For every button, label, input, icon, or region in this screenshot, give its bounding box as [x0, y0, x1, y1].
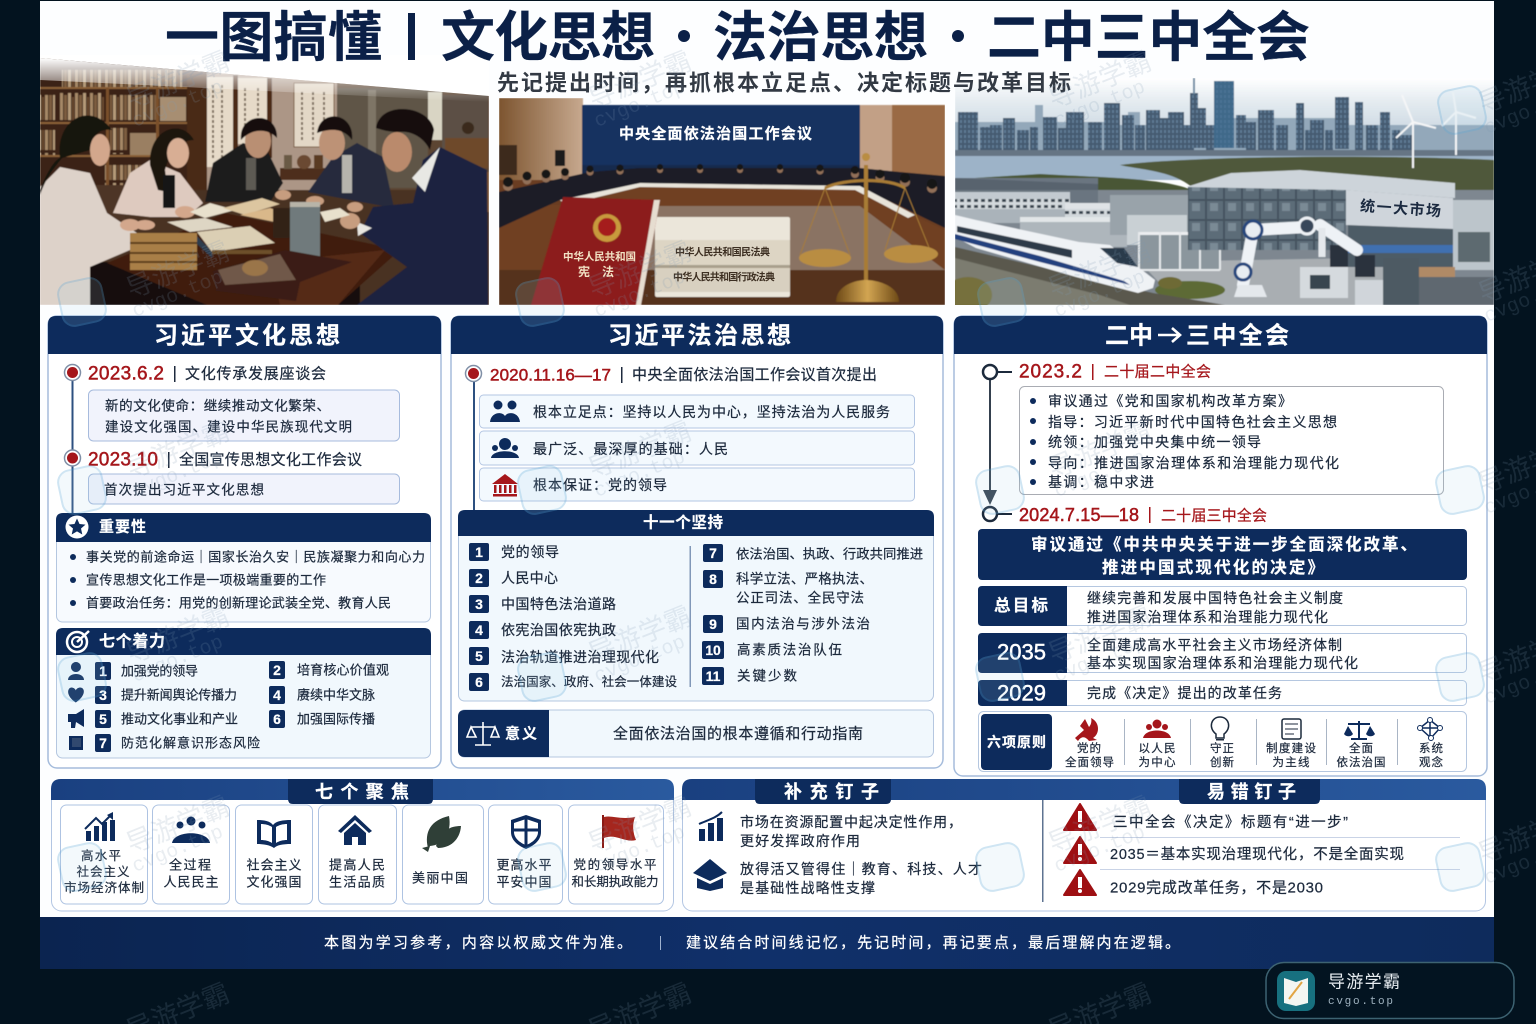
meeting backdrop title: 中央全面依法治国工作会议 — [619, 124, 812, 142]
brand badge: cvgo.top — [1328, 996, 1393, 1008]
title: 文化思想 — [441, 8, 655, 68]
watermark layer: cvgo.top — [591, 446, 689, 504]
left building — [955, 177, 1099, 203]
focus card 6: 平安中国 — [496, 874, 552, 890]
timeline node 2024.7.15-18: 二十届三中全会 — [1161, 506, 1267, 524]
box: first proposed — [88, 474, 400, 504]
row: overall goal: 总目标 — [994, 596, 1048, 615]
watermark layer: 导游学霸 — [584, 236, 696, 304]
seven efforts list: 1 — [99, 663, 107, 679]
focus card 7 — [568, 805, 664, 904]
panel heading: culture: 习近平文化思想 — [154, 322, 340, 350]
timeline node 2020.11.16-17: 2020.11.16—17 — [490, 366, 611, 384]
right list items 7-11: 国内法治与涉外法治 — [736, 616, 870, 632]
row: 2029: 完成《决定》提出的改革任务 — [1087, 685, 1282, 701]
watermark layer: cvgo.top — [129, 446, 227, 504]
panel heading: plenary sessions — [954, 316, 1487, 354]
icon: people meeting — [172, 816, 210, 843]
principle: systems thinking: 观念 — [1419, 755, 1444, 769]
watermark layer: cvgo.top — [591, 266, 689, 324]
warning 2: 2035＝基本实现治理现代化，不是全面实现 — [1110, 845, 1404, 863]
focus card 5: 美丽中国 — [412, 870, 468, 886]
icon: crowd — [491, 438, 519, 458]
sub-panel: 十一个坚持 — [458, 510, 934, 701]
left list items 1-6: 法治轨道推进治理现代化 — [501, 649, 659, 665]
heading tab: 七个聚焦 — [315, 781, 409, 802]
principle: institution building: 制度建设 — [1266, 741, 1316, 755]
bookshelf wall — [40, 60, 206, 186]
right list items 7-11: 11 — [706, 668, 721, 684]
arrow: second to third plenary — [983, 379, 997, 505]
note: education, science, talent: 放得活又管得住｜教育、科技、人才 — [740, 861, 982, 877]
icon: house — [338, 815, 372, 845]
row: 2029 — [978, 680, 1466, 706]
row: overall goal — [978, 586, 1466, 626]
right list items 7-11: 依法治国、执政、行政共同推进 — [736, 546, 923, 562]
left list items 1-6: 3 — [475, 596, 483, 612]
sub-panel: 重要性: 宣传思想文化工作是一项极端重要的工作 — [86, 572, 326, 588]
timeline node 2023.10: 2023.10 — [88, 450, 158, 470]
constitution book text: 中华人民共和国 — [563, 250, 636, 263]
bushes — [1155, 281, 1225, 299]
principle: party leadership: 全面领导 — [1065, 755, 1114, 769]
row: six principles — [978, 712, 1466, 772]
focus card 3: 社会主义 — [246, 858, 302, 872]
sub-panel: 七个着力: 七个着力 — [99, 632, 165, 650]
focus card 3: 文化强国 — [246, 874, 302, 890]
mid buildings — [1064, 208, 1110, 218]
man right — [357, 147, 488, 305]
watermark layer: cvgo.top — [129, 76, 227, 134]
principle: people-centred — [1138, 720, 1176, 769]
watermark layer: cvgo.top — [129, 631, 227, 689]
watermark layer: 导游学霸 — [122, 791, 234, 859]
title — [165, 8, 1310, 68]
seven efforts list: 赓续中华文脉 — [297, 688, 375, 702]
watermark layer: cvgo.top — [591, 76, 689, 134]
law code book text — [673, 246, 775, 284]
watermark layer: cvgo.top — [1051, 446, 1149, 504]
focus card 1: 高水平 — [81, 848, 121, 863]
warning 3: 2029完成改革任务，不是2030 — [1110, 880, 1323, 896]
bar: significance: 意义 — [505, 724, 537, 742]
footer band: 建议结合时间线记忆，先记时间，再记要点，最后理解内在逻辑。 — [686, 934, 1180, 952]
row: overall goal: 继续完善和发展中国特色社会主义制度 — [1087, 590, 1343, 606]
turbines — [1396, 95, 1436, 168]
row: 2035: 2035 — [997, 640, 1046, 664]
box: broadest foundation: 最广泛、最深厚的基础：人民 — [533, 441, 728, 457]
timeline node 2023.2: 二十届二中全会 — [1104, 362, 1211, 380]
row: 2029: 2029 — [997, 680, 1046, 706]
banner: decision title: 推进中国式现代化的决定》 — [1102, 557, 1324, 577]
timeline node 2023.10 — [64, 450, 362, 470]
constitution book text: 宪 法 — [578, 264, 614, 279]
timeline node 2020.11.16-17 — [466, 366, 877, 384]
focus card 4: 提高人民 — [329, 858, 385, 872]
heading tab: supplementary: 补充钉子 — [784, 781, 879, 802]
sub-panel: 重要性: 重要性 — [99, 518, 146, 536]
seven efforts list — [95, 661, 389, 752]
seven efforts list: 培育核心价值观 — [297, 662, 389, 678]
note: market role — [740, 814, 962, 849]
box: new cultural mission — [88, 390, 400, 441]
subtitle: 先记提出时间，再抓根本立足点、决定标题与改革目标 — [497, 70, 1071, 96]
photo: study group at table with books — [40, 50, 489, 305]
panel heading: rule of law — [451, 316, 943, 354]
row: 2035: 全面建成高水平社会主义市场经济体制 — [1087, 637, 1342, 653]
left list items 1-6: 6 — [475, 674, 483, 690]
panel: 七个聚焦 — [51, 779, 674, 911]
seven efforts list: 5 — [99, 711, 107, 727]
left list items 1-6: 人民中心 — [501, 570, 558, 586]
ground — [955, 190, 1494, 305]
far skyline — [955, 105, 1494, 152]
photo top fade — [40, 55, 489, 96]
focus card 1 — [60, 805, 148, 904]
principle: innovation: 创新 — [1210, 755, 1234, 769]
seven efforts list: 防范化解意识形态风险 — [121, 736, 260, 750]
bar: significance — [458, 710, 934, 757]
focus card 7: 和长期执政能力 — [572, 875, 658, 889]
left list items 1-6: 党的领导 — [501, 544, 559, 560]
market building sign: 统一大市场 — [1360, 197, 1442, 220]
brand badge: 导游学霸 — [1328, 972, 1400, 992]
right list items 7-11: 8 — [709, 571, 717, 587]
watermark layer: 导游学霸 — [584, 791, 696, 859]
watermark layer: cvgo.top — [591, 821, 689, 879]
box: broadest foundation — [480, 431, 914, 465]
watermark layer: 导游学霸 — [1044, 791, 1156, 859]
icon: graduation cap — [693, 859, 727, 891]
watermark layer: 导游学霸 — [122, 236, 234, 304]
principle: people-centred: 以人民 — [1138, 742, 1176, 755]
principle: innovation: 守正 — [1210, 741, 1234, 755]
principle: innovation — [1210, 717, 1234, 769]
focus card 4: 生活品质 — [329, 874, 385, 890]
box: second plenary points — [1020, 386, 1444, 494]
principle: party leadership: 党的 — [1077, 741, 1101, 755]
principle: systems thinking — [1418, 718, 1444, 769]
focus card 3 — [236, 805, 312, 904]
watermark layer: 导游学霸 — [584, 601, 696, 669]
box: second plenary points: 基调：稳中求进 — [1048, 474, 1154, 490]
seven efforts list: 加强党的领导 — [121, 664, 198, 678]
right list items 7-11: 10 — [705, 642, 721, 658]
focus card 7: 党的领导水平 — [574, 857, 656, 872]
title: 一图搞懂 — [165, 8, 382, 68]
watermark layer: 导游学霸 — [122, 46, 234, 114]
panel: 二中→三中全会 — [954, 316, 1487, 776]
icon: star — [66, 516, 88, 538]
right list items 7-11: 科学立法、严格执法、 — [736, 572, 873, 586]
left list items 1-6: 法治国家、政府、社会一体建设 — [501, 674, 677, 689]
sub-panel: 重要性: 事关党的前途命运｜国家长治久安｜民族凝聚力和向心力 — [86, 550, 425, 564]
footer band: 本图为学习参考，内容以权威文件为准。 — [324, 934, 632, 952]
law code book text: 中华人民共和国民法典 — [675, 246, 770, 258]
constitution book text — [563, 250, 636, 279]
man centre-right — [308, 143, 394, 208]
left list items 1-6: 中国特色法治道路 — [501, 596, 616, 612]
right list items 7-11: 9 — [709, 616, 717, 632]
man centre-left — [205, 143, 283, 202]
icon: scales — [467, 722, 499, 745]
timeline node 2023.6.2 — [64, 364, 326, 384]
box: second plenary points: 审议通过《党和国家机构改革方案》 — [1048, 393, 1292, 409]
principle: institution building: 为主线 — [1272, 755, 1310, 769]
sub-panel: 重要性 — [56, 513, 431, 622]
principle: systems thinking: 系统 — [1419, 742, 1444, 755]
machinery — [1300, 267, 1348, 298]
box: second plenary points: 统领：加强党中央集中统一领导 — [1048, 434, 1261, 450]
seven efforts list: 7 — [99, 735, 107, 751]
focus card 4 — [318, 805, 396, 904]
icon: book — [69, 736, 83, 750]
sub-panel: 重要性: 首要政治任务：用党的创新理论武装全党、教育人民 — [86, 596, 391, 610]
watermark layer: cvgo.top — [1051, 76, 1149, 134]
timeline node 2023.10: 全国宣传思想文化工作会议 — [179, 450, 362, 468]
icon: heart — [68, 688, 84, 702]
icon: shield — [511, 815, 541, 849]
icon: people group — [490, 400, 520, 422]
panel heading: plenary sessions: 三中全会 — [1186, 322, 1289, 350]
seven efforts list: 4 — [273, 687, 281, 703]
watermark layer: 导游学霸 — [584, 416, 696, 484]
watermark layer: cvgo.top — [129, 821, 227, 879]
sub-panel: 七个着力 — [56, 628, 431, 758]
timeline node 2020.11.16-17: 中央全面依法治国工作会议首次提出 — [632, 366, 877, 384]
brand badge — [1266, 962, 1514, 1018]
principle: rule of law: 依法治国 — [1336, 755, 1386, 769]
panel heading: culture — [48, 316, 441, 354]
box: second plenary points: 导向：推进国家治理体系和治理能力现代化 — [1048, 455, 1339, 471]
watermark layer: 导游学霸 — [1044, 416, 1156, 484]
timeline node 2023.2 — [983, 362, 1211, 382]
left list items 1-6: 1 — [475, 544, 483, 560]
table — [90, 262, 360, 305]
seven efforts list: 2 — [273, 662, 281, 678]
panel heading: plenary sessions: 二中 — [1105, 322, 1153, 350]
warning 1: 三中全会《决定》标题有“进一步” — [1113, 813, 1348, 831]
seven efforts list: 推动文化事业和产业 — [121, 712, 238, 726]
focus card 6: 更高水平 — [496, 858, 552, 872]
banner: decision title — [978, 529, 1467, 580]
timeline line — [473, 375, 475, 511]
books — [190, 203, 235, 218]
seven efforts list: 3 — [99, 687, 107, 703]
box: fundamental guarantee: 根本保证：党的领导 — [533, 477, 667, 493]
bar: significance: 全面依法治国的根本遵循和行动指南 — [613, 724, 863, 742]
watermark layer: cvgo.top — [591, 631, 689, 689]
watermark layer: cvgo.top — [1051, 266, 1149, 324]
watermark layer: cvgo.top — [1051, 821, 1149, 879]
watermark layer: 导游学霸 — [1044, 601, 1156, 669]
left list items 1-6: 2 — [475, 570, 483, 586]
note: education, science, talent: 是基础性战略性支撑 — [740, 880, 875, 896]
note: education, science, talent — [740, 861, 982, 896]
warning 3 — [1064, 870, 1323, 896]
box: first proposed: 首次提出习近平文化思想 — [104, 482, 264, 498]
principle: institution building — [1266, 719, 1316, 769]
heading tab: common errors: 易错钉子 — [1207, 782, 1296, 802]
banner: decision title: 审议通过《中共中央关于进一步全面深化改革、 — [1031, 534, 1417, 554]
heading tab: supplementary — [755, 779, 891, 804]
icon: person — [68, 662, 84, 680]
title: 二中三中全会 — [987, 8, 1310, 68]
icon: megaphone — [68, 709, 84, 728]
principle: party leadership — [1065, 718, 1114, 769]
icon: growth chart — [85, 812, 115, 841]
box: new cultural mission: 建设文化强国、建设中华民族现代文明 — [105, 420, 352, 434]
sub-panel: 十一个坚持: 十一个坚持 — [643, 514, 723, 532]
watermark layer: 导游学霸 — [122, 416, 234, 484]
warning 1 — [1064, 804, 1348, 831]
right list items 7-11: 关键少数 — [737, 668, 798, 684]
panel heading: rule of law: 习近平法治思想 — [608, 322, 791, 350]
footer band — [40, 917, 1494, 969]
icon: great hall — [492, 474, 518, 496]
note: market role: 市场在资源配置中起决定性作用， — [740, 814, 962, 830]
row: six principles: 六项原则 — [987, 734, 1046, 750]
law code book text: 中华人民共和国行政法典 — [673, 270, 775, 284]
icon: red flag — [602, 815, 636, 848]
viaduct — [955, 247, 1225, 305]
panel: 习近平法治思想 — [451, 316, 943, 768]
box: new cultural mission: 新的文化使命：继续推动文化繁荣、 — [105, 398, 330, 414]
seven efforts list: 提升新闻舆论传播力 — [121, 688, 237, 702]
focus card 1: 社会主义 — [76, 864, 130, 879]
right list items 7-11: 高素质法治队伍 — [737, 642, 842, 658]
focus card 6 — [488, 805, 562, 904]
photo: city skyline, high-speed train and robot — [944, 78, 1494, 313]
focus card 5 — [402, 805, 484, 904]
heading tab: common errors — [1179, 779, 1320, 804]
principle: people-centred: 为中心 — [1138, 756, 1176, 769]
main hall — [1188, 187, 1346, 250]
row: 2035: 基本实现国家治理体系和治理能力现代化 — [1087, 655, 1358, 671]
focus card 2: 人民民主 — [164, 874, 218, 890]
woman centre — [113, 160, 203, 217]
seven efforts list: 6 — [273, 711, 281, 727]
panel: 补充钉子 + 易错钉子 — [682, 779, 1486, 911]
timeline node 2024.7.15-18 — [983, 505, 1267, 525]
icon: bars — [699, 812, 723, 841]
seven efforts list: 加强国际传播 — [297, 712, 375, 726]
title: 法治思想 — [713, 8, 928, 68]
left list items 1-6 — [469, 543, 677, 691]
icon: leaves — [422, 816, 461, 852]
timeline node 2023.2: 2023.2 — [1019, 362, 1082, 382]
box: fundamental foothold: 根本立足点：坚持以人民为中心，坚持法治为人民服务 — [533, 404, 890, 420]
note: market role: 更好发挥政府作用 — [740, 833, 860, 849]
box: fundamental foothold — [480, 395, 914, 428]
right list items 7-11: 7 — [709, 545, 717, 561]
principle: rule of law — [1336, 721, 1386, 769]
warning 2 — [1064, 837, 1404, 863]
focus card 1: 市场经济体制 — [64, 880, 144, 895]
icon: open book — [257, 820, 291, 848]
principle: rule of law: 全面 — [1349, 741, 1373, 755]
left list items 1-6: 5 — [475, 648, 483, 664]
left list items 1-6: 4 — [475, 622, 483, 638]
timeline node 2023.6.2: 2023.6.2 — [88, 364, 164, 384]
icon: target — [67, 631, 89, 652]
woman left — [40, 167, 137, 305]
watermark layer: 导游学霸 — [1044, 46, 1156, 114]
right list items 7-11 — [702, 544, 923, 685]
icon: brand map — [1277, 971, 1315, 1011]
row: overall goal: 推进国家治理体系和治理能力现代化 — [1087, 609, 1328, 625]
timeline node 2024.7.15-18: 2024.7.15—18 — [1019, 505, 1139, 525]
box: second plenary points: 指导：习近平新时代中国特色社会主义思想 — [1048, 414, 1337, 430]
photo: law conference with constitution and scales — [499, 98, 945, 305]
focus card 2: 全过程 — [169, 858, 211, 872]
watermark layer: cvgo.top — [1051, 631, 1149, 689]
focus card 2 — [152, 805, 230, 904]
box: fundamental guarantee — [480, 468, 914, 501]
watermark layer: cvgo.top — [129, 266, 227, 324]
panel: 习近平文化思想 — [48, 316, 441, 768]
near skyline — [958, 81, 1412, 151]
robot arm — [1243, 225, 1357, 285]
train — [955, 215, 1155, 293]
row: 2035 — [978, 633, 1466, 673]
heading tab — [288, 779, 433, 804]
left list items 1-6: 依宪治国依宪执政 — [501, 622, 616, 638]
right list items 7-11: 公正司法、全民守法 — [736, 590, 864, 606]
watermark layer: 导游学霸 — [122, 601, 234, 669]
watermark layer: 导游学霸 — [1044, 236, 1156, 304]
timeline line — [72, 373, 74, 513]
timeline node 2023.6.2: 文化传承发展座谈会 — [185, 366, 326, 382]
watermark layer: 导游学霸 — [584, 46, 696, 114]
